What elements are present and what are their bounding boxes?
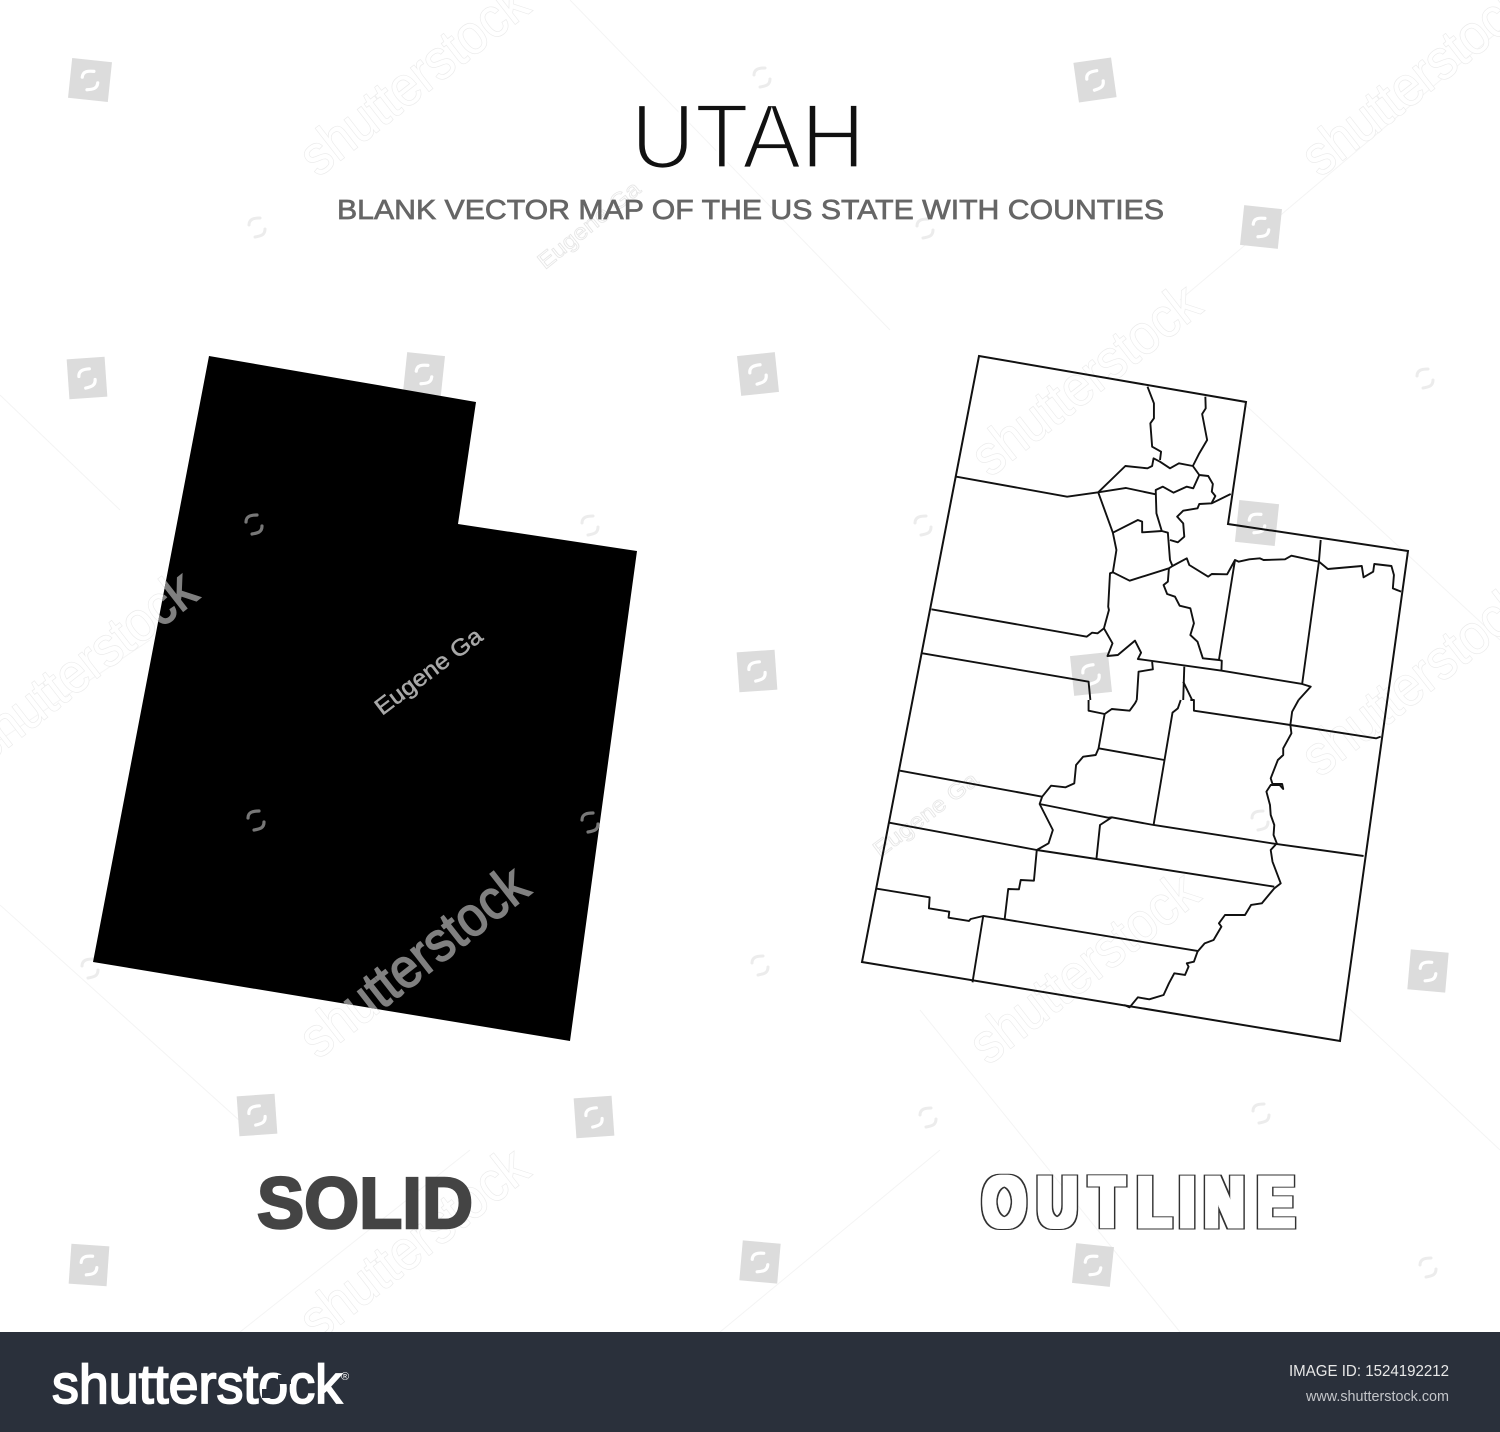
watermark: shutterstock text: shutterstock — [959, 270, 1212, 487]
label: solid: SOLID — [257, 1164, 473, 1244]
image id: IMAGE ID: 1524192212 — [1289, 1363, 1449, 1380]
label: outline: OUTLINE — [983, 1162, 1294, 1243]
registered mark: ® — [341, 1371, 349, 1383]
website: www.shutterstock.com — [1305, 1388, 1449, 1405]
outline map with counties — [862, 356, 1408, 1041]
solid map: shutterstock — [287, 852, 540, 1069]
watermark: small outlined marks — [82, 68, 1436, 1277]
subtitle: BLANK VECTOR MAP OF THE US STATE WITH COUNTIES — [337, 194, 1164, 225]
solid map — [93, 356, 637, 1041]
watermark: shutterstock text: shutterstock — [287, 1134, 540, 1351]
watermark: grey squares — [67, 58, 1449, 1287]
watermark: shutterstock text: shutterstock — [287, 852, 540, 1069]
watermark: author name: Eugene Ga — [532, 175, 646, 274]
footer logo: shutterstock — [52, 1353, 342, 1415]
watermark: author name: Eugene Ga — [868, 766, 984, 862]
solid map: Eugene Ga — [369, 622, 487, 720]
watermark: author name — [532, 175, 984, 862]
title: UTAH — [631, 86, 865, 188]
watermark: shutterstock text: shutterstock — [957, 858, 1210, 1075]
footer bar — [0, 1332, 1500, 1432]
